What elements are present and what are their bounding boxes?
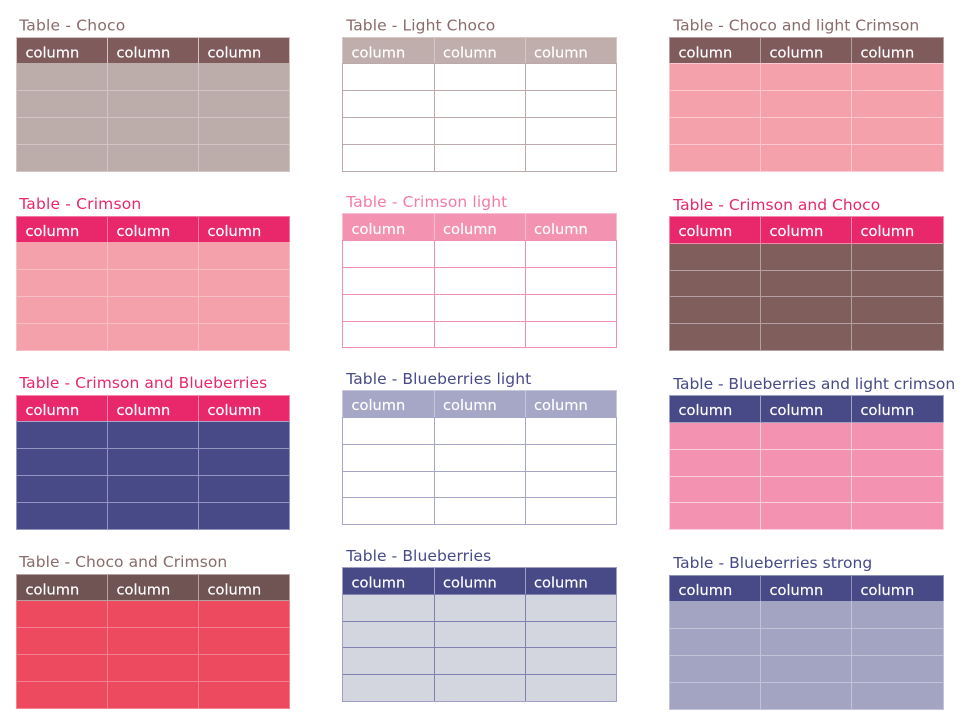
- panel: Table - Choco and Crimson: column: [26, 582, 79, 598]
- panel: Table - Blueberries and light crimson: column: [770, 402, 823, 419]
- panel: Table - Light Choco: column: [352, 44, 405, 62]
- panel: Table - Choco and light Crimson: column: [678, 44, 732, 62]
- panel: Table - Blueberries strong: column: [860, 582, 914, 599]
- panel: Table - Crimson and Blueberries: column: [116, 402, 170, 419]
- panel: Table - Crimson light: column: [534, 221, 588, 238]
- panel: Table - Choco and light Crimson: column: [860, 44, 914, 62]
- panel: Table - Choco and Crimson: column: [208, 582, 261, 598]
- panel: Table - Blueberries light: [342, 370, 617, 524]
- panel: Table - Crimson and Choco: [669, 196, 944, 351]
- panel: Table - Crimson light: Table - Crimson light: [345, 193, 507, 211]
- panel: Table - Crimson: column: [116, 223, 170, 240]
- panel: Table - Choco: Table - Choco: [18, 16, 125, 34]
- panel: Table - Light Choco: column: [443, 44, 497, 62]
- panel: Table - Blueberries light: column: [534, 397, 588, 414]
- panel: Table - Blueberries light: column: [443, 397, 497, 414]
- panel: Table - Blueberries: column: [443, 574, 497, 592]
- panel: Table - Crimson and Choco: column: [860, 223, 914, 240]
- panel: Table - Light Choco: Table - Light Choco: [345, 16, 495, 34]
- panel: Table - Blueberries light: column: [352, 397, 405, 414]
- panel: Table - Crimson and Choco: Table - Crimson and Choco: [672, 196, 880, 214]
- panel: Table - Blueberries strong: column: [770, 582, 823, 599]
- panel: Table - Crimson and Blueberries: [16, 374, 290, 530]
- panel: Table - Choco and Crimson: Table - Choco and Crimson: [18, 553, 227, 571]
- panel: Table - Crimson light: [342, 193, 617, 348]
- panel: Table - Crimson and Blueberries: Table - Crimson and Blueberries: [18, 374, 267, 392]
- panel: Table - Light Choco: column: [534, 44, 588, 62]
- panel: Table - Crimson light: column: [443, 221, 497, 238]
- panel: Table - Blueberries and light crimson: column: [678, 402, 732, 419]
- panel: Table - Crimson and Choco: column: [770, 223, 823, 240]
- panel: Table - Crimson: Table - Crimson: [18, 195, 141, 213]
- panel: Table - Blueberries: [342, 547, 617, 702]
- panel: Table - Blueberries strong: Table - Blueberries strong: [672, 554, 872, 572]
- panel: Table - Choco: column: [26, 44, 79, 62]
- panel: Table - Choco: column: [208, 44, 261, 62]
- panel: Table - Crimson light: column: [352, 221, 405, 238]
- panel: Table - Blueberries light: Table - Blueberries light: [345, 370, 531, 388]
- panel: Table - Choco: [16, 16, 290, 172]
- panel: Table - Choco and light Crimson: [669, 16, 944, 172]
- panel: Table - Blueberries: column: [534, 574, 588, 592]
- panel: Table - Crimson: [16, 195, 290, 351]
- panel: Table - Blueberries and light crimson: [669, 375, 955, 530]
- panel: Table - Blueberries and light crimson: column: [860, 402, 914, 419]
- panel: Table - Choco: column: [116, 44, 170, 62]
- panel: Table - Blueberries and light crimson: Table - Blueberries and light crimson: [672, 375, 955, 393]
- panel: Table - Crimson and Blueberries: column: [208, 402, 261, 419]
- panel: Table - Choco and light Crimson: column: [770, 44, 823, 62]
- panel: Table - Choco and light Crimson: Table - Choco and light Crimson: [672, 16, 919, 34]
- panel: Table - Crimson and Choco: column: [678, 223, 732, 240]
- panel: Table - Blueberries: column: [352, 574, 405, 592]
- panel: Table - Choco and Crimson: column: [116, 582, 170, 598]
- panel: Table - Blueberries strong: column: [678, 582, 732, 599]
- panel: Table - Crimson: column: [26, 223, 79, 240]
- panel: Table - Crimson: column: [208, 223, 261, 240]
- panel: Table - Crimson and Blueberries: column: [26, 402, 79, 419]
- panel: Table - Light Choco: [342, 16, 617, 172]
- panel: Table - Blueberries strong: [669, 554, 944, 710]
- panel: Table - Blueberries: Table - Blueberries: [345, 547, 491, 565]
- panel: Table - Choco and Crimson: [16, 553, 290, 709]
